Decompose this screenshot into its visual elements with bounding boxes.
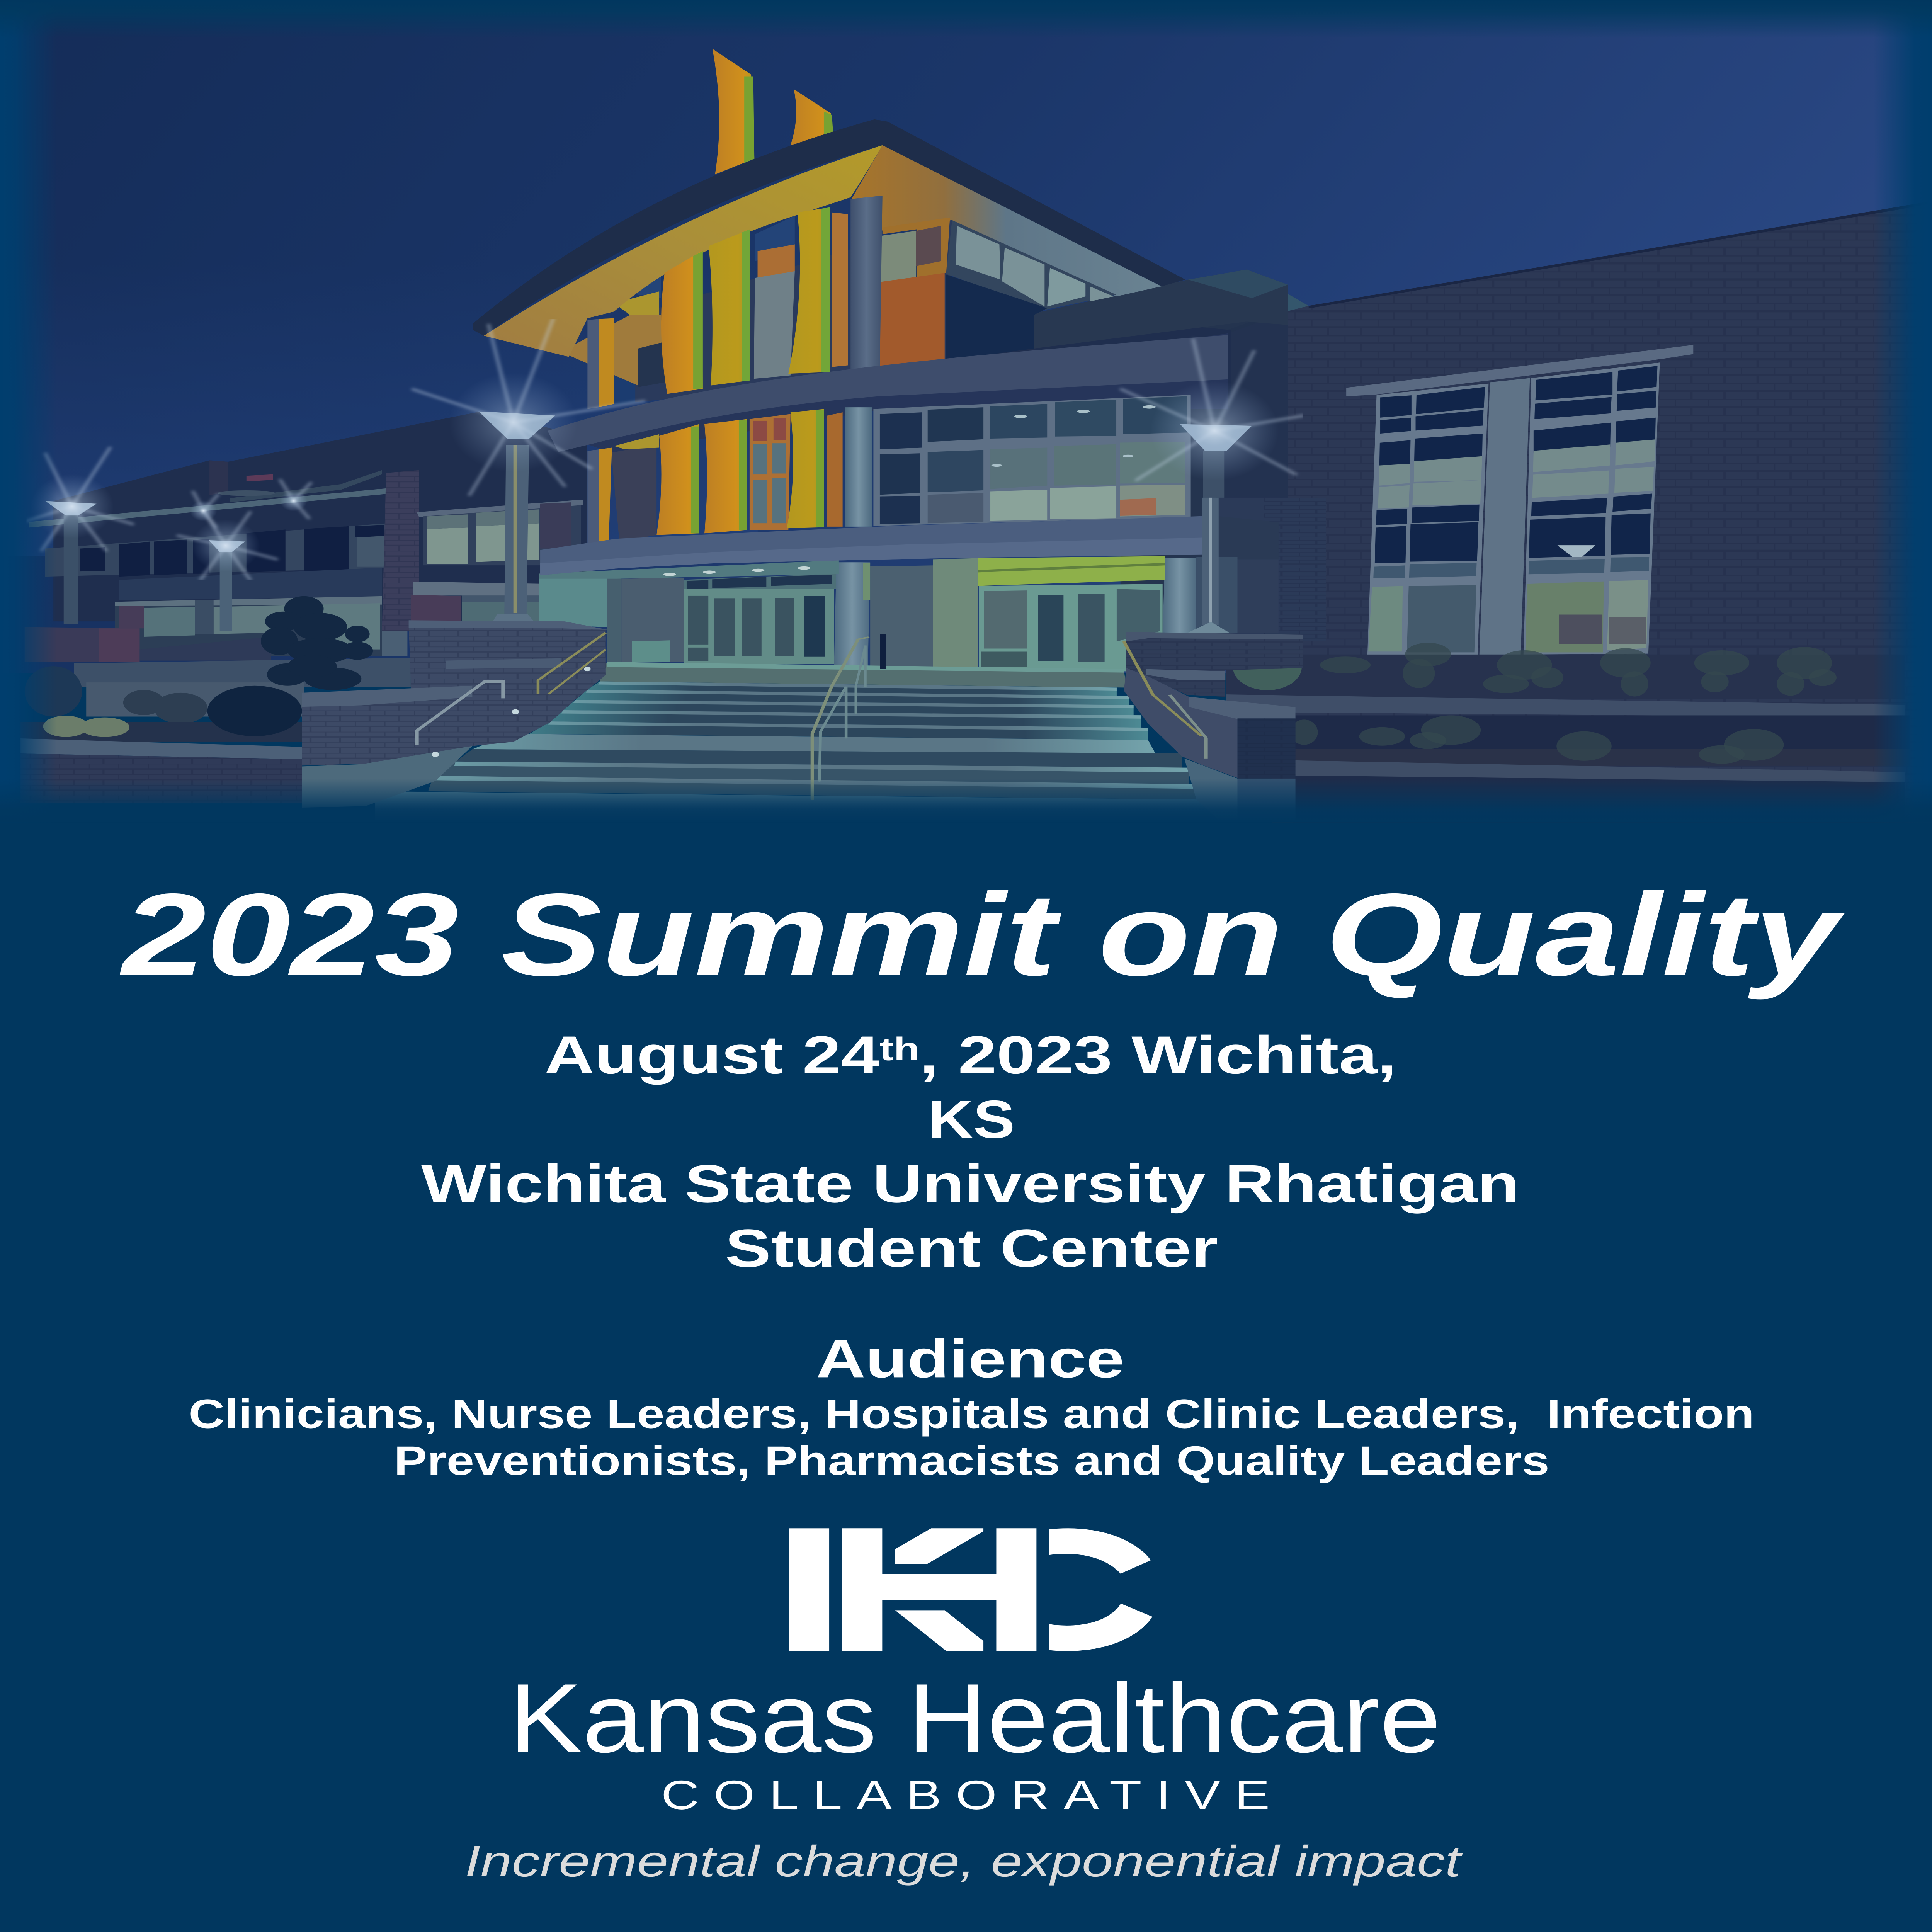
backing under fascia	[548, 333, 1228, 453]
lamp posts	[64, 515, 78, 624]
orange brace and glazing	[758, 244, 795, 278]
pine tree	[261, 596, 373, 690]
audience list line two: Preventionists, Pharmacists and Quality Leaders	[394, 1438, 1549, 1483]
canopy ceiling	[539, 560, 839, 579]
handrails	[417, 682, 503, 745]
lamp head and post	[1180, 424, 1252, 451]
venue line one: Wichita State University Rhatigan	[421, 1154, 1519, 1214]
event details	[421, 1025, 1519, 1278]
right railing	[1124, 641, 1201, 736]
window panes	[1375, 366, 1658, 563]
doors two	[979, 584, 1163, 672]
canopy band	[540, 516, 1202, 575]
low brick walls	[25, 627, 139, 662]
glass facade	[873, 395, 1191, 526]
entry walls	[539, 574, 607, 627]
roof	[473, 119, 1185, 336]
lamp heads	[45, 501, 97, 515]
lit office windows	[417, 500, 583, 517]
upper storeys	[53, 412, 587, 621]
lime green sign	[978, 556, 1165, 586]
tower interior	[625, 218, 954, 402]
audience block	[189, 1329, 1754, 1483]
photo: Rhatigan Student Center at night	[0, 0, 1932, 834]
soft photo edges	[0, 0, 1932, 823]
left stair wall	[302, 620, 608, 808]
dark side block and brick	[1216, 498, 1326, 641]
left wing building	[20, 412, 587, 803]
second-floor windows	[45, 523, 386, 577]
planter beds	[1226, 655, 1905, 699]
date and city: , 2023 Wichita,	[920, 1025, 1396, 1085]
landing	[600, 663, 1126, 687]
ground floor glass	[115, 596, 382, 656]
shrubs	[1231, 643, 1837, 764]
brick column	[382, 470, 419, 631]
logo wordmark: Kansas Healthcare	[509, 1663, 1441, 1773]
vertical panels upper	[661, 251, 703, 394]
date and city: August 24	[544, 1025, 879, 1085]
planter ledge and brick wall	[20, 738, 302, 759]
stair treads	[432, 682, 1199, 789]
lower panels	[611, 444, 656, 542]
stairs	[375, 682, 1245, 820]
fascia band	[548, 335, 1228, 452]
lamp glows and star rays	[27, 319, 1303, 580]
grey column	[850, 196, 883, 372]
venue line two: Student Center	[725, 1218, 1218, 1278]
central tower with coloured fins	[473, 49, 1288, 556]
plaza	[74, 658, 411, 687]
right brick wing	[1121, 201, 1932, 834]
brick section	[883, 218, 950, 278]
terrace railing	[29, 488, 386, 527]
logo subtitle: COLLABORATIVE	[661, 1772, 1270, 1818]
audience list line one: Clinicians, Nurse Leaders, Hospitals and Clinic Leaders, Infection	[189, 1391, 1754, 1437]
right lamp post	[1202, 498, 1219, 625]
soffit	[484, 145, 883, 357]
tagline: Incremental change, exponential impact	[465, 1837, 1463, 1886]
title: 2023 Summit on Quality	[120, 869, 1847, 1001]
audience heading: Audience	[816, 1329, 1124, 1389]
clerestory windows	[946, 220, 1116, 310]
logo mark: KHC	[789, 1528, 1152, 1651]
lower page panel	[0, 823, 1932, 1932]
right lower pier	[1124, 668, 1238, 778]
sky	[0, 0, 1932, 673]
state: KS	[928, 1089, 1015, 1149]
shrubs	[20, 666, 304, 742]
right dark block	[1220, 311, 1288, 556]
right upper pier	[1126, 633, 1303, 697]
doors one	[684, 586, 834, 664]
entrance level	[375, 498, 1326, 820]
door column	[834, 562, 870, 668]
right column	[1163, 558, 1196, 633]
window frame	[1367, 384, 1488, 655]
centre railing	[812, 634, 886, 799]
date and city: th	[879, 1031, 920, 1067]
fins	[713, 49, 754, 174]
